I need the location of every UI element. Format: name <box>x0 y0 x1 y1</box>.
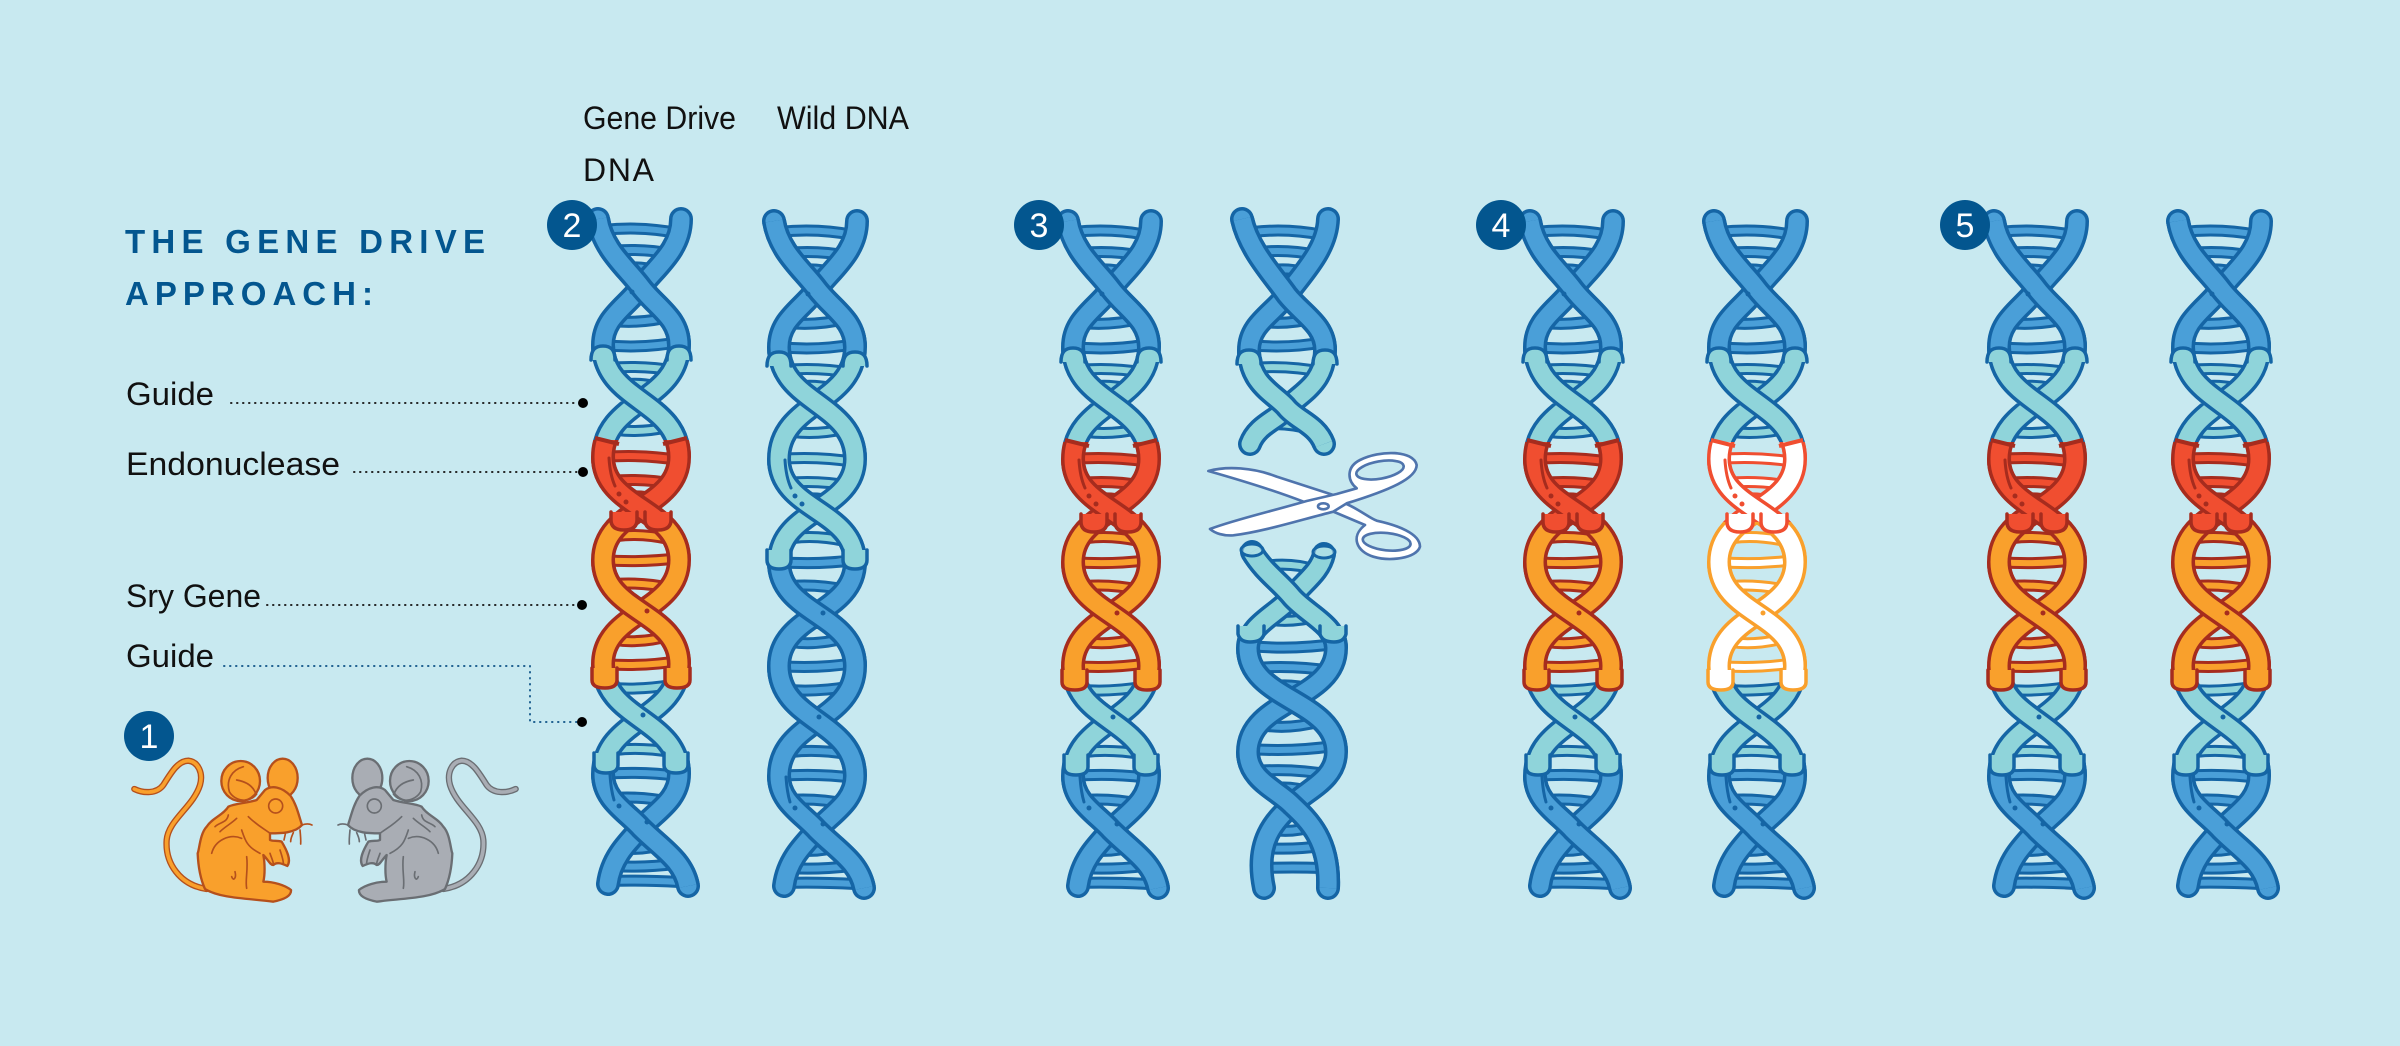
column heading: gene drive DNA: Gene Drive <box>583 100 736 136</box>
column heading: gene drive DNA: DNA <box>583 152 655 188</box>
label: sry gene <box>126 578 587 614</box>
step badge 5: 5 <box>1956 207 1974 245</box>
label: guide upper <box>126 376 588 412</box>
icon: orange mouse <box>134 759 312 902</box>
helix: converted DNA, step 5 <box>2171 221 2271 888</box>
helix: wild DNA upper piece after cut, step 3 <box>1237 219 1337 444</box>
column heading: wild DNA: Wild DNA <box>777 100 910 136</box>
step badge 1 <box>124 711 174 761</box>
helix: gene drive DNA, step 2 <box>591 219 691 886</box>
label: guide upper: Guide <box>126 376 214 412</box>
title <box>125 223 485 312</box>
label: endonuclease: Endonuclease <box>126 446 340 482</box>
step badge 2: 2 <box>563 207 581 245</box>
helix: wild DNA, step 2 <box>767 221 867 888</box>
label: guide lower: Guide <box>126 638 214 674</box>
helix: wild DNA lower piece after cut, step 3 <box>1238 544 1346 888</box>
step badge 3: 3 <box>1030 207 1048 245</box>
helix: gene drive DNA, step 3 <box>1061 221 1161 888</box>
step badge 4: 4 <box>1492 207 1510 245</box>
label: endonuclease <box>126 446 588 482</box>
step badge 4 <box>1476 200 1526 250</box>
helix: wild DNA with copied white sequence, step 4 <box>1707 221 1807 888</box>
label: guide lower <box>126 638 587 727</box>
label: sry gene: Sry Gene <box>126 578 261 614</box>
step badge 2 <box>547 200 597 250</box>
column heading: gene drive DNA <box>583 100 736 188</box>
step badge 1: 1 <box>140 718 158 756</box>
title: APPROACH: <box>125 275 373 312</box>
title: THE GENE DRIVE <box>125 223 485 260</box>
icon: scissors <box>1208 453 1420 559</box>
step badge 5 <box>1940 200 1990 250</box>
step badge 3 <box>1014 200 1064 250</box>
helix: gene drive DNA, step 5 <box>1987 221 2087 888</box>
helix: gene drive DNA, step 4 <box>1523 221 1623 888</box>
icon: grey mouse <box>338 759 516 902</box>
